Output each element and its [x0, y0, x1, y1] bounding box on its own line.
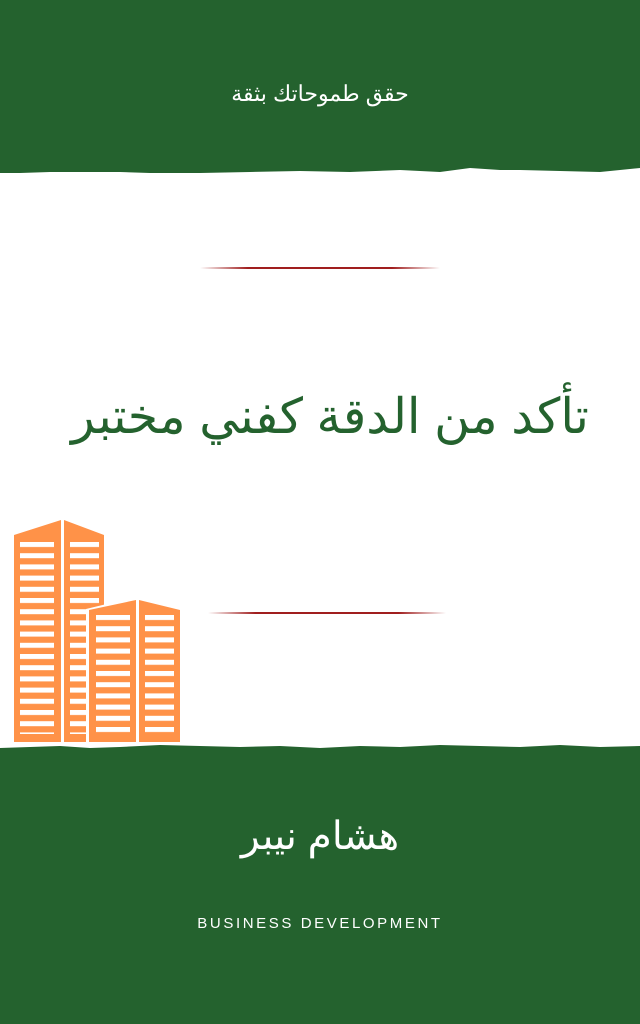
divider line bottom	[208, 612, 446, 614]
author name: هشام نيبر	[241, 815, 399, 858]
icon: buildings	[14, 520, 180, 742]
main title: تأكد من الدقة كفني مختبر	[71, 390, 589, 444]
tagline: BUSINESS DEVELOPMENT	[197, 915, 443, 932]
top green band	[0, 0, 640, 173]
subtitle: حقق طموحاتك بثقة	[231, 81, 409, 106]
divider line top	[200, 267, 440, 269]
bottom green band	[0, 745, 640, 1024]
